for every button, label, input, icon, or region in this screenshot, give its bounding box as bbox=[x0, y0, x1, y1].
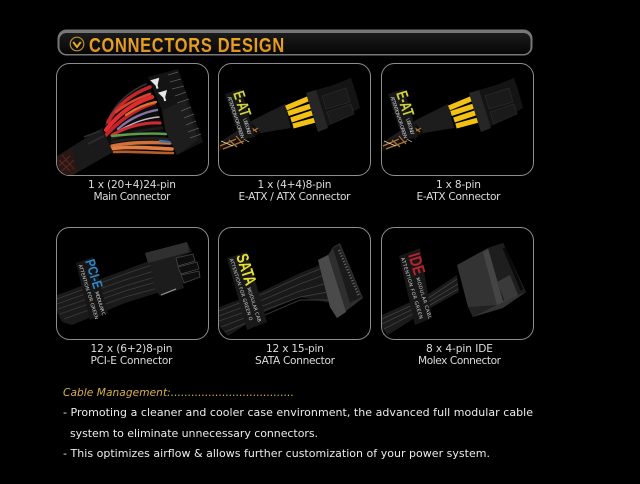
bullet: cleaner and cooler: - Promoting a cleaner and cooler case environment, the advanced full modular cable bbox=[63, 406, 533, 419]
icon: Molex cable photo bbox=[382, 243, 526, 335]
caption: IDE connector: Molex Connector bbox=[418, 355, 502, 367]
panel: IDE connector bbox=[382, 228, 534, 340]
label tag: MODULAR CABL bbox=[414, 277, 432, 320]
panel: E-ATX connector bbox=[382, 64, 534, 176]
label tag: ATTENTION FOR GREEN bbox=[226, 96, 245, 140]
caption: IDE connector: 8 x 4-pin IDE bbox=[426, 343, 493, 355]
caption: main connector bbox=[88, 179, 176, 203]
icon: 8 pin cable photo bbox=[382, 78, 523, 151]
caption: E-ATX/ATX connector: 1 x (4+4)8-pin bbox=[258, 179, 332, 191]
label tag: ATTENTION FOR GREEN O bbox=[228, 258, 253, 322]
label tag: ATTENTION FOR GREEN bbox=[77, 264, 99, 320]
label tag bbox=[227, 251, 267, 330]
caption: PCI-E connector bbox=[90, 343, 173, 367]
label tag: ATTENTION FOR GREEN bbox=[399, 257, 424, 320]
panel: E-ATX/ATX connector bbox=[218, 64, 370, 176]
text block: cable management bbox=[63, 387, 533, 460]
label tag bbox=[399, 248, 432, 325]
caption: SATA connector: SATA Connector bbox=[255, 355, 336, 367]
bullet continuation: system to eliminate unnecessary connectors. bbox=[70, 427, 318, 440]
caption: PCI-E connector: 12 x (6+2)8-pin bbox=[90, 343, 172, 355]
label tag bbox=[388, 89, 418, 140]
label tag: USE ONLY bbox=[404, 118, 415, 136]
caption: main connector: 1 x (20+4)24-pin bbox=[88, 179, 176, 191]
caption: E-ATX connector: 1 x 8-pin bbox=[436, 179, 481, 191]
heading: cable management: Cable Management:.................................... bbox=[63, 387, 294, 399]
label tag: PCI-E bbox=[82, 257, 106, 291]
label tag: E-AT bbox=[229, 89, 253, 119]
caption: SATA connector: 12 x 15-pin bbox=[266, 343, 324, 355]
label tag: SATA bbox=[232, 251, 260, 288]
caption: main connector: Main Connector bbox=[94, 191, 171, 203]
panel: main connector bbox=[56, 64, 208, 176]
label tag: MODULAR CAB bbox=[245, 287, 262, 323]
icon: PCI-E cable photo bbox=[57, 242, 200, 325]
label tag bbox=[76, 257, 108, 320]
panel: SATA connector bbox=[218, 228, 370, 340]
bullet: airflow: - This optimizes airflow & allows further customization of your power system. bbox=[63, 447, 490, 460]
label tag: USE ONLY bbox=[241, 118, 252, 136]
caption: IDE connector bbox=[418, 343, 502, 367]
caption: SATA connector bbox=[255, 343, 336, 367]
caption: PCI-E connector: PCI-E Connector bbox=[90, 355, 173, 367]
label tag: IDE bbox=[404, 251, 429, 277]
label tag bbox=[225, 89, 255, 140]
caption: E-ATX connector bbox=[416, 179, 501, 203]
label tag: MODULAR C bbox=[93, 291, 106, 317]
title bar bbox=[58, 30, 532, 56]
icon: chevron circle bbox=[70, 37, 84, 51]
label tag: E-AT bbox=[392, 89, 416, 119]
icon: 24-pin cable photo bbox=[57, 69, 203, 175]
caption: E-ATX connector: E-ATX Connector bbox=[416, 191, 501, 203]
icon: SATA cable photo bbox=[219, 243, 363, 336]
caption: E-ATX/ATX connector bbox=[238, 179, 351, 203]
label tag: ATTENTION FOR GREEN bbox=[389, 96, 408, 140]
icon: 4+4 pin cable photo bbox=[219, 78, 360, 151]
caption: E-ATX/ATX connector: E-ATX / ATX Connector bbox=[238, 191, 351, 203]
title: CONNECTORS DESIGN bbox=[89, 33, 284, 56]
panel: PCI-E connector bbox=[56, 228, 208, 340]
